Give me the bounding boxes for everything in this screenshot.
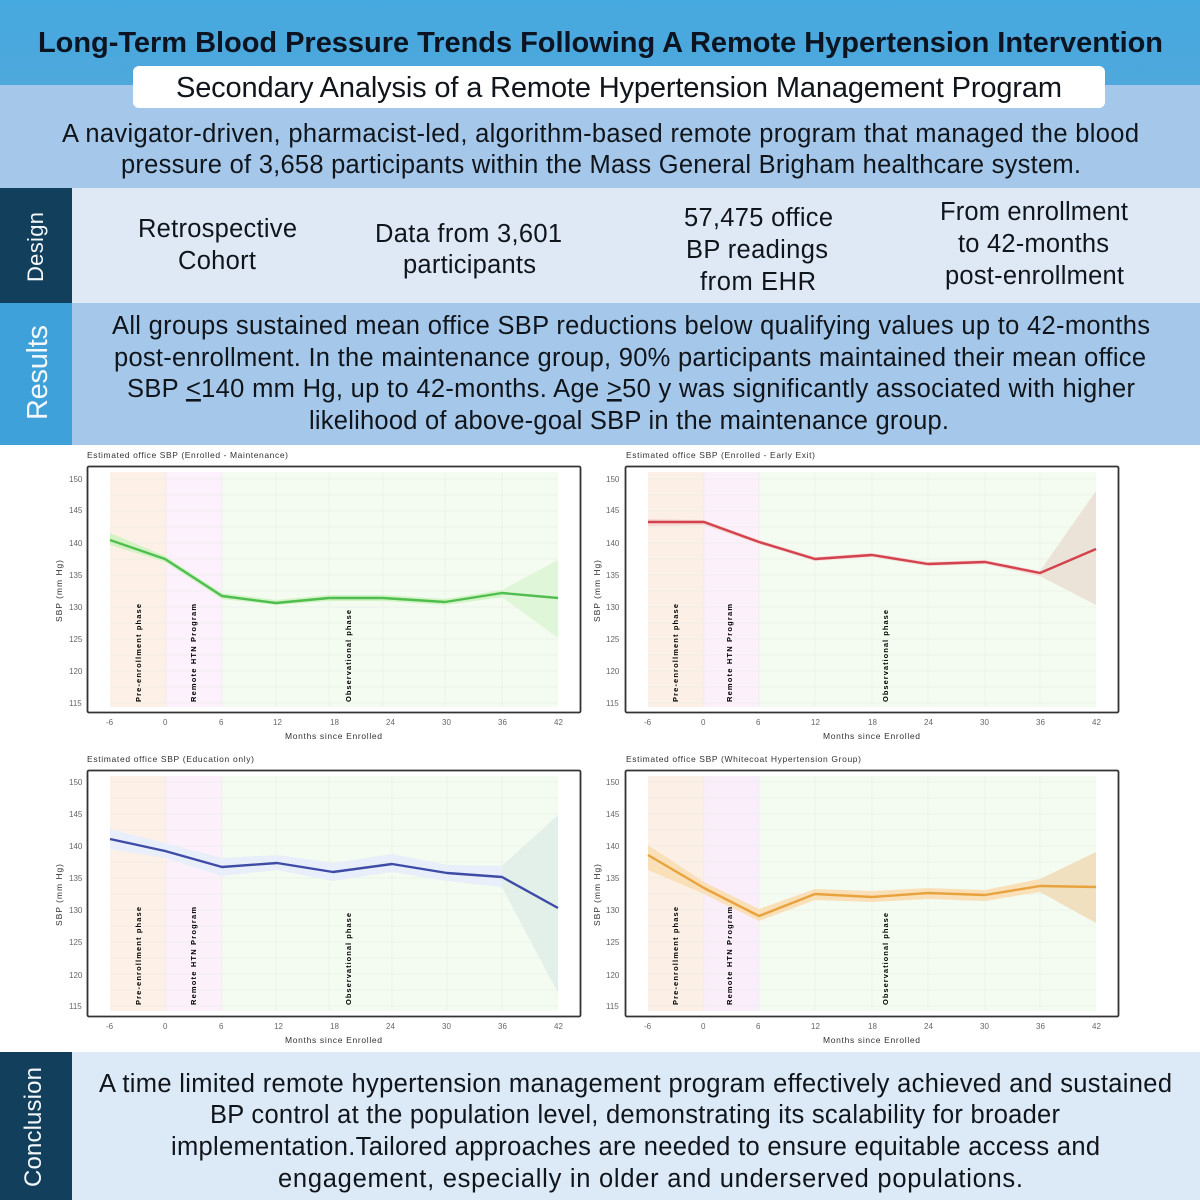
y axis: 135 [606,571,620,580]
y axis: 130 [606,603,620,612]
phase shading [110,776,558,1011]
title: Long-Term Blood Pressure Trends Following A Remote Hypertension Intervention [38,27,1163,59]
x axis: 0 [701,1022,706,1031]
y axis: 140 [69,539,83,548]
program description: A navigator-driven, pharmacist-led, algorithm-based remote program that managed the blood [62,120,1139,148]
phase labels: Observational phase [881,913,890,1005]
conclusion text: engagement, especially in older and underserved populations. [278,1165,1023,1193]
x axis: 36 [1036,1022,1045,1031]
x axis: 12 [811,718,820,727]
y axis: 120 [606,667,620,676]
y axis: 115 [69,1002,82,1011]
y axis: 125 [606,938,620,947]
x axis: 6 [756,718,761,727]
y axis: SBP (mm Hg) [592,560,602,622]
y axis: 150 [69,475,83,484]
chart title: Estimated office SBP (Enrolled - Maintenance) [87,450,288,460]
chart title: Estimated office SBP (Enrolled - Early Exit) [626,450,815,460]
subtitle box [133,66,1105,108]
y axis: 135 [69,571,83,580]
y axis: 120 [69,667,83,676]
panel: results [0,303,1200,445]
y axis: 145 [606,810,620,819]
x axis: 6 [219,1022,224,1031]
x axis: 30 [980,718,989,727]
plot frame [88,770,580,1016]
x axis: -6 [644,718,652,727]
design: study type: Cohort [178,247,256,275]
x axis: 30 [442,1022,451,1031]
phase labels [671,604,890,702]
y axis: 115 [69,699,82,708]
conclusion text: A time limited remote hypertension management program effectively achieved and sustained [99,1070,1172,1098]
confidence band [110,829,502,887]
x axis: 36 [1036,718,1045,727]
x axis: 18 [330,718,339,727]
y axis: 135 [606,874,620,883]
conclusion text [99,1070,1172,1193]
chart title: Estimated office SBP (Whitecoat Hypertension Group) [626,754,861,764]
y axis: 145 [69,506,83,515]
design: follow-up: From enrollment [940,198,1128,226]
phase labels: Pre-enrollment phase [134,907,143,1005]
y axis: 125 [69,938,83,947]
x axis: 24 [924,1022,933,1031]
trend line [648,522,1096,573]
phase shading [648,776,1096,1011]
conclusion text: BP control at the population level, demonstrating its scalability for broader [210,1101,1060,1129]
design: study type [138,215,297,275]
phase labels [134,907,353,1005]
phase labels: Observational phase [344,610,353,702]
conclusion text: implementation.Tailored approaches are needed to ensure equitable access and [171,1133,1100,1161]
y axis: 115 [606,699,619,708]
y axis: 150 [606,778,620,787]
design: participants [375,220,562,279]
x axis: 42 [554,718,563,727]
x axis: 24 [386,1022,395,1031]
y axis: 125 [69,635,83,644]
x axis: -6 [106,1022,114,1031]
x axis: 0 [701,718,706,727]
x axis: 6 [756,1022,761,1031]
y axis [592,475,620,708]
y axis: 140 [606,539,620,548]
results label [0,303,72,445]
x axis: 12 [811,1022,820,1031]
y axis: 130 [69,603,83,612]
y axis [592,778,620,1011]
y axis: 125 [606,635,620,644]
results text: post-enrollment. In the maintenance group, 90% participants maintained their mean office [114,344,1146,372]
x axis: Months since Enrolled [823,731,920,741]
trend line [648,855,1096,916]
confidence band [648,845,1040,921]
chart: education only [54,754,580,1045]
x axis: 30 [442,718,451,727]
program description [62,120,1139,179]
x axis: 12 [273,718,282,727]
design: readings: from EHR [700,268,816,296]
design: readings: 57,475 office [684,204,833,232]
x axis [644,718,1101,741]
x axis: 18 [868,718,877,727]
design: participants: Data from 3,601 [375,220,562,248]
x axis: 42 [1092,1022,1101,1031]
plot frame [626,770,1118,1016]
phase labels: Remote HTN Program [189,604,198,702]
phase labels: Pre-enrollment phase [134,604,143,702]
y axis [54,778,83,1011]
chart: enrolled - early exit [592,450,1118,741]
phase shading [110,472,558,707]
results text [112,312,1150,435]
results text: likelihood of above-goal SBP in the maintenance group. [309,407,949,435]
y axis: SBP (mm Hg) [54,560,64,622]
design: follow-up: post-enrollment [945,262,1124,290]
y axis: SBP (mm Hg) [592,864,602,926]
x axis: 24 [386,718,395,727]
x axis: 12 [274,1022,283,1031]
results text: All groups sustained mean office SBP reductions below qualifying values up to 42-months [112,312,1150,340]
x axis: 36 [498,1022,507,1031]
chart: whitecoat hypertension group [592,754,1118,1045]
chart title: Estimated office SBP (Education only) [87,754,254,764]
x axis: 36 [498,718,507,727]
phase labels [134,604,353,702]
x axis: Months since Enrolled [285,731,382,741]
x axis: Months since Enrolled [823,1035,920,1045]
y axis: 150 [606,475,620,484]
phase labels: Remote HTN Program [725,907,734,1005]
conclusion label: Conclusion [20,1067,47,1187]
panel: conclusion [0,1052,1200,1200]
design label: Design [23,212,48,282]
results label: Results [22,325,54,420]
x axis: -6 [644,1022,652,1031]
phase shading [648,472,1096,707]
phase labels: Remote HTN Program [189,907,198,1005]
program description: pressure of 3,658 participants within the Mass General Brigham healthcare system. [121,151,1081,179]
x axis: 0 [163,718,168,727]
y axis: 140 [606,842,620,851]
y axis: 150 [69,778,83,787]
plot frame [626,466,1118,712]
plot frame [88,466,580,712]
x axis: 30 [980,1022,989,1031]
results text: SBP <140 mm Hg, up to 42-months. Age >50 y was significantly associated with higher [127,375,1136,403]
y axis: 130 [69,906,83,915]
x axis [106,718,563,741]
design: study type: Retrospective [138,215,297,243]
y axis: 120 [606,971,620,980]
y axis: 130 [606,906,620,915]
trend line [110,839,558,908]
x axis: 18 [868,1022,877,1031]
subtitle box: Secondary Analysis of a Remote Hypertension Management Program [176,72,1062,104]
y axis: 145 [606,506,620,515]
y axis: 140 [69,842,83,851]
y axis: 120 [69,971,83,980]
phase labels: Pre-enrollment phase [671,604,680,702]
phase labels: Pre-enrollment phase [671,907,680,1005]
y axis [54,475,83,708]
phase labels: Observational phase [344,913,353,1005]
confidence band [648,519,1040,576]
design: participants: participants [403,251,536,279]
x axis: 24 [924,718,933,727]
conclusion label [0,1052,72,1200]
y axis: 145 [69,810,83,819]
y axis: SBP (mm Hg) [54,864,64,926]
design: follow-up: to 42-months [958,230,1109,258]
header band [0,0,1200,85]
phase labels: Observational phase [881,610,890,702]
x axis: -6 [106,718,114,727]
x axis: 18 [330,1022,339,1031]
design: readings: BP readings [686,236,828,264]
panel: design [0,188,1200,303]
chart: enrolled - maintenance [54,450,580,741]
phase labels: Remote HTN Program [725,604,734,702]
intro band [0,66,1200,188]
x axis: 0 [163,1022,168,1031]
y axis: 115 [606,1002,619,1011]
x axis: 42 [1092,718,1101,727]
design: follow-up [940,198,1128,290]
trend line [110,540,558,603]
y axis: 135 [69,874,83,883]
design: readings [684,204,833,296]
design label [0,188,72,303]
x axis: 42 [554,1022,563,1031]
phase labels [671,907,890,1005]
x axis: 6 [219,718,224,727]
x axis [644,1022,1101,1045]
x axis: Months since Enrolled [285,1035,382,1045]
confidence band [110,533,502,605]
x axis [106,1022,563,1045]
